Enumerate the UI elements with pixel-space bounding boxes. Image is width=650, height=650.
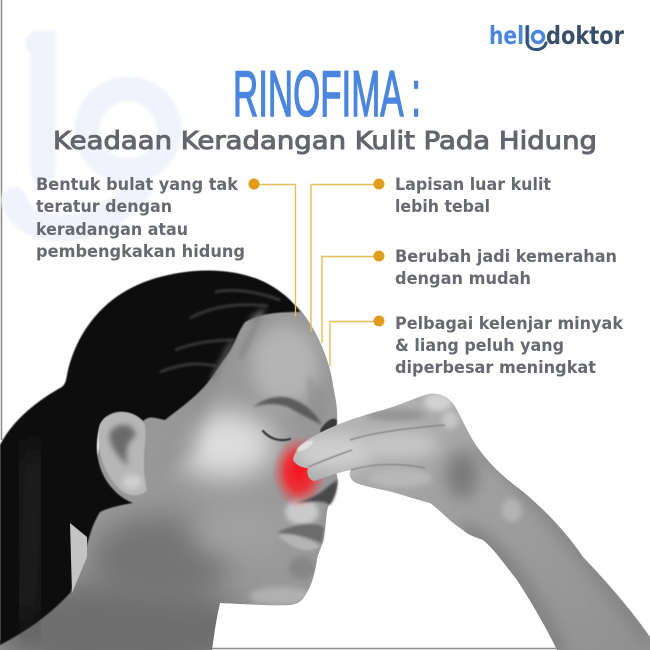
text block: left callout: pembengkakan hidung [36, 242, 245, 262]
text block: left callout [36, 175, 245, 262]
text block: glands: & liang peluh yang [395, 336, 564, 356]
red inflamed nose [272, 436, 326, 508]
title: RINOFIMA : [233, 57, 421, 130]
watermark logo [14, 43, 169, 229]
callout dots [248, 178, 384, 326]
nose and lips [277, 480, 337, 550]
eyebrow and eye [253, 378, 337, 440]
text block: outer skin: lebih tebal [395, 197, 490, 217]
text block: glands: diperbesar meningkat [395, 358, 596, 378]
text block: glands: Pelbagai kelenjar minyak [395, 314, 624, 334]
text block: left callout: keradangan atau [36, 220, 188, 240]
woman in profile [0, 270, 650, 650]
hand and arm [285, 385, 650, 650]
text block: outer skin: Lapisan luar kulit [395, 175, 551, 195]
text block: redness: Berubah jadi kemerahan [395, 247, 617, 267]
logo: hell [489, 21, 531, 50]
text block: redness [395, 247, 617, 289]
ear [98, 412, 147, 495]
text block: left callout: Bentuk bulat yang tak [36, 175, 239, 195]
icon: stethoscope [527, 27, 546, 50]
logo: doktor [546, 21, 625, 50]
face and neck [0, 290, 345, 650]
connector lines [254, 184, 379, 366]
hair and ponytail [0, 270, 300, 645]
logo [489, 21, 625, 50]
subtitle: Keadaan Keradangan Kulit Pada Hidung [53, 126, 597, 155]
text block: outer skin [395, 175, 551, 217]
text block: redness: dengan mudah [395, 269, 531, 289]
light gap behind neck [70, 523, 87, 593]
text block: glands [395, 314, 624, 378]
text block: left callout: teratur dengan [36, 197, 172, 217]
